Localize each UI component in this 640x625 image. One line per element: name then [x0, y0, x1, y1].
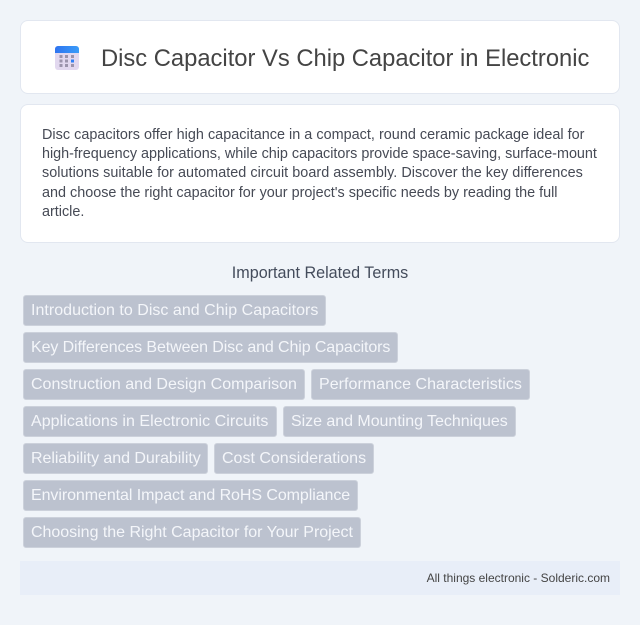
footer: All things electronic - Solderic.com [427, 571, 610, 585]
tag [23, 406, 277, 437]
intro paragraph: and choose the right capacitor for your project's specific needs by reading the full [42, 185, 558, 201]
tag [23, 517, 361, 548]
section heading: Important Related Terms [232, 264, 408, 282]
icon: calendar grid [55, 46, 79, 70]
tag [283, 406, 516, 437]
tag: Environmental Impact and RoHS Compliance [31, 487, 350, 504]
intro text panel [20, 104, 620, 243]
tag: Reliability and Durability [31, 450, 201, 467]
tag: Key Differences Between Disc and Chip Capacitors [31, 339, 390, 356]
tag: Introduction to Disc and Chip Capacitors [31, 302, 318, 319]
tag: Performance Characteristics [319, 376, 522, 393]
tag [311, 369, 530, 400]
intro paragraph: high-frequency applications, while chip capacitors provide space-saving, surface-mount [42, 146, 597, 162]
footer [20, 561, 620, 595]
tag [23, 480, 358, 511]
intro paragraph: Disc capacitors offer high capacitance in a compact, round ceramic package ideal for [42, 127, 584, 143]
tag: Applications in Electronic Circuits [31, 413, 268, 430]
intro paragraph: article. [42, 204, 84, 220]
title: Disc Capacitor Vs Chip Capacitor in Electronic [101, 45, 589, 72]
header panel [20, 20, 620, 94]
tag [214, 443, 374, 474]
tag [23, 369, 305, 400]
tag [23, 332, 398, 363]
related terms tag list [23, 295, 530, 548]
tag: Size and Mounting Techniques [291, 413, 508, 430]
intro paragraph [42, 127, 597, 220]
tag [23, 443, 208, 474]
tag: Cost Considerations [222, 450, 366, 467]
tag [23, 295, 326, 326]
intro paragraph: solutions suitable for automated circuit board assembly. Discover the key differences [42, 165, 583, 181]
tag: Choosing the Right Capacitor for Your Project [31, 524, 353, 541]
tag: Construction and Design Comparison [31, 376, 297, 393]
